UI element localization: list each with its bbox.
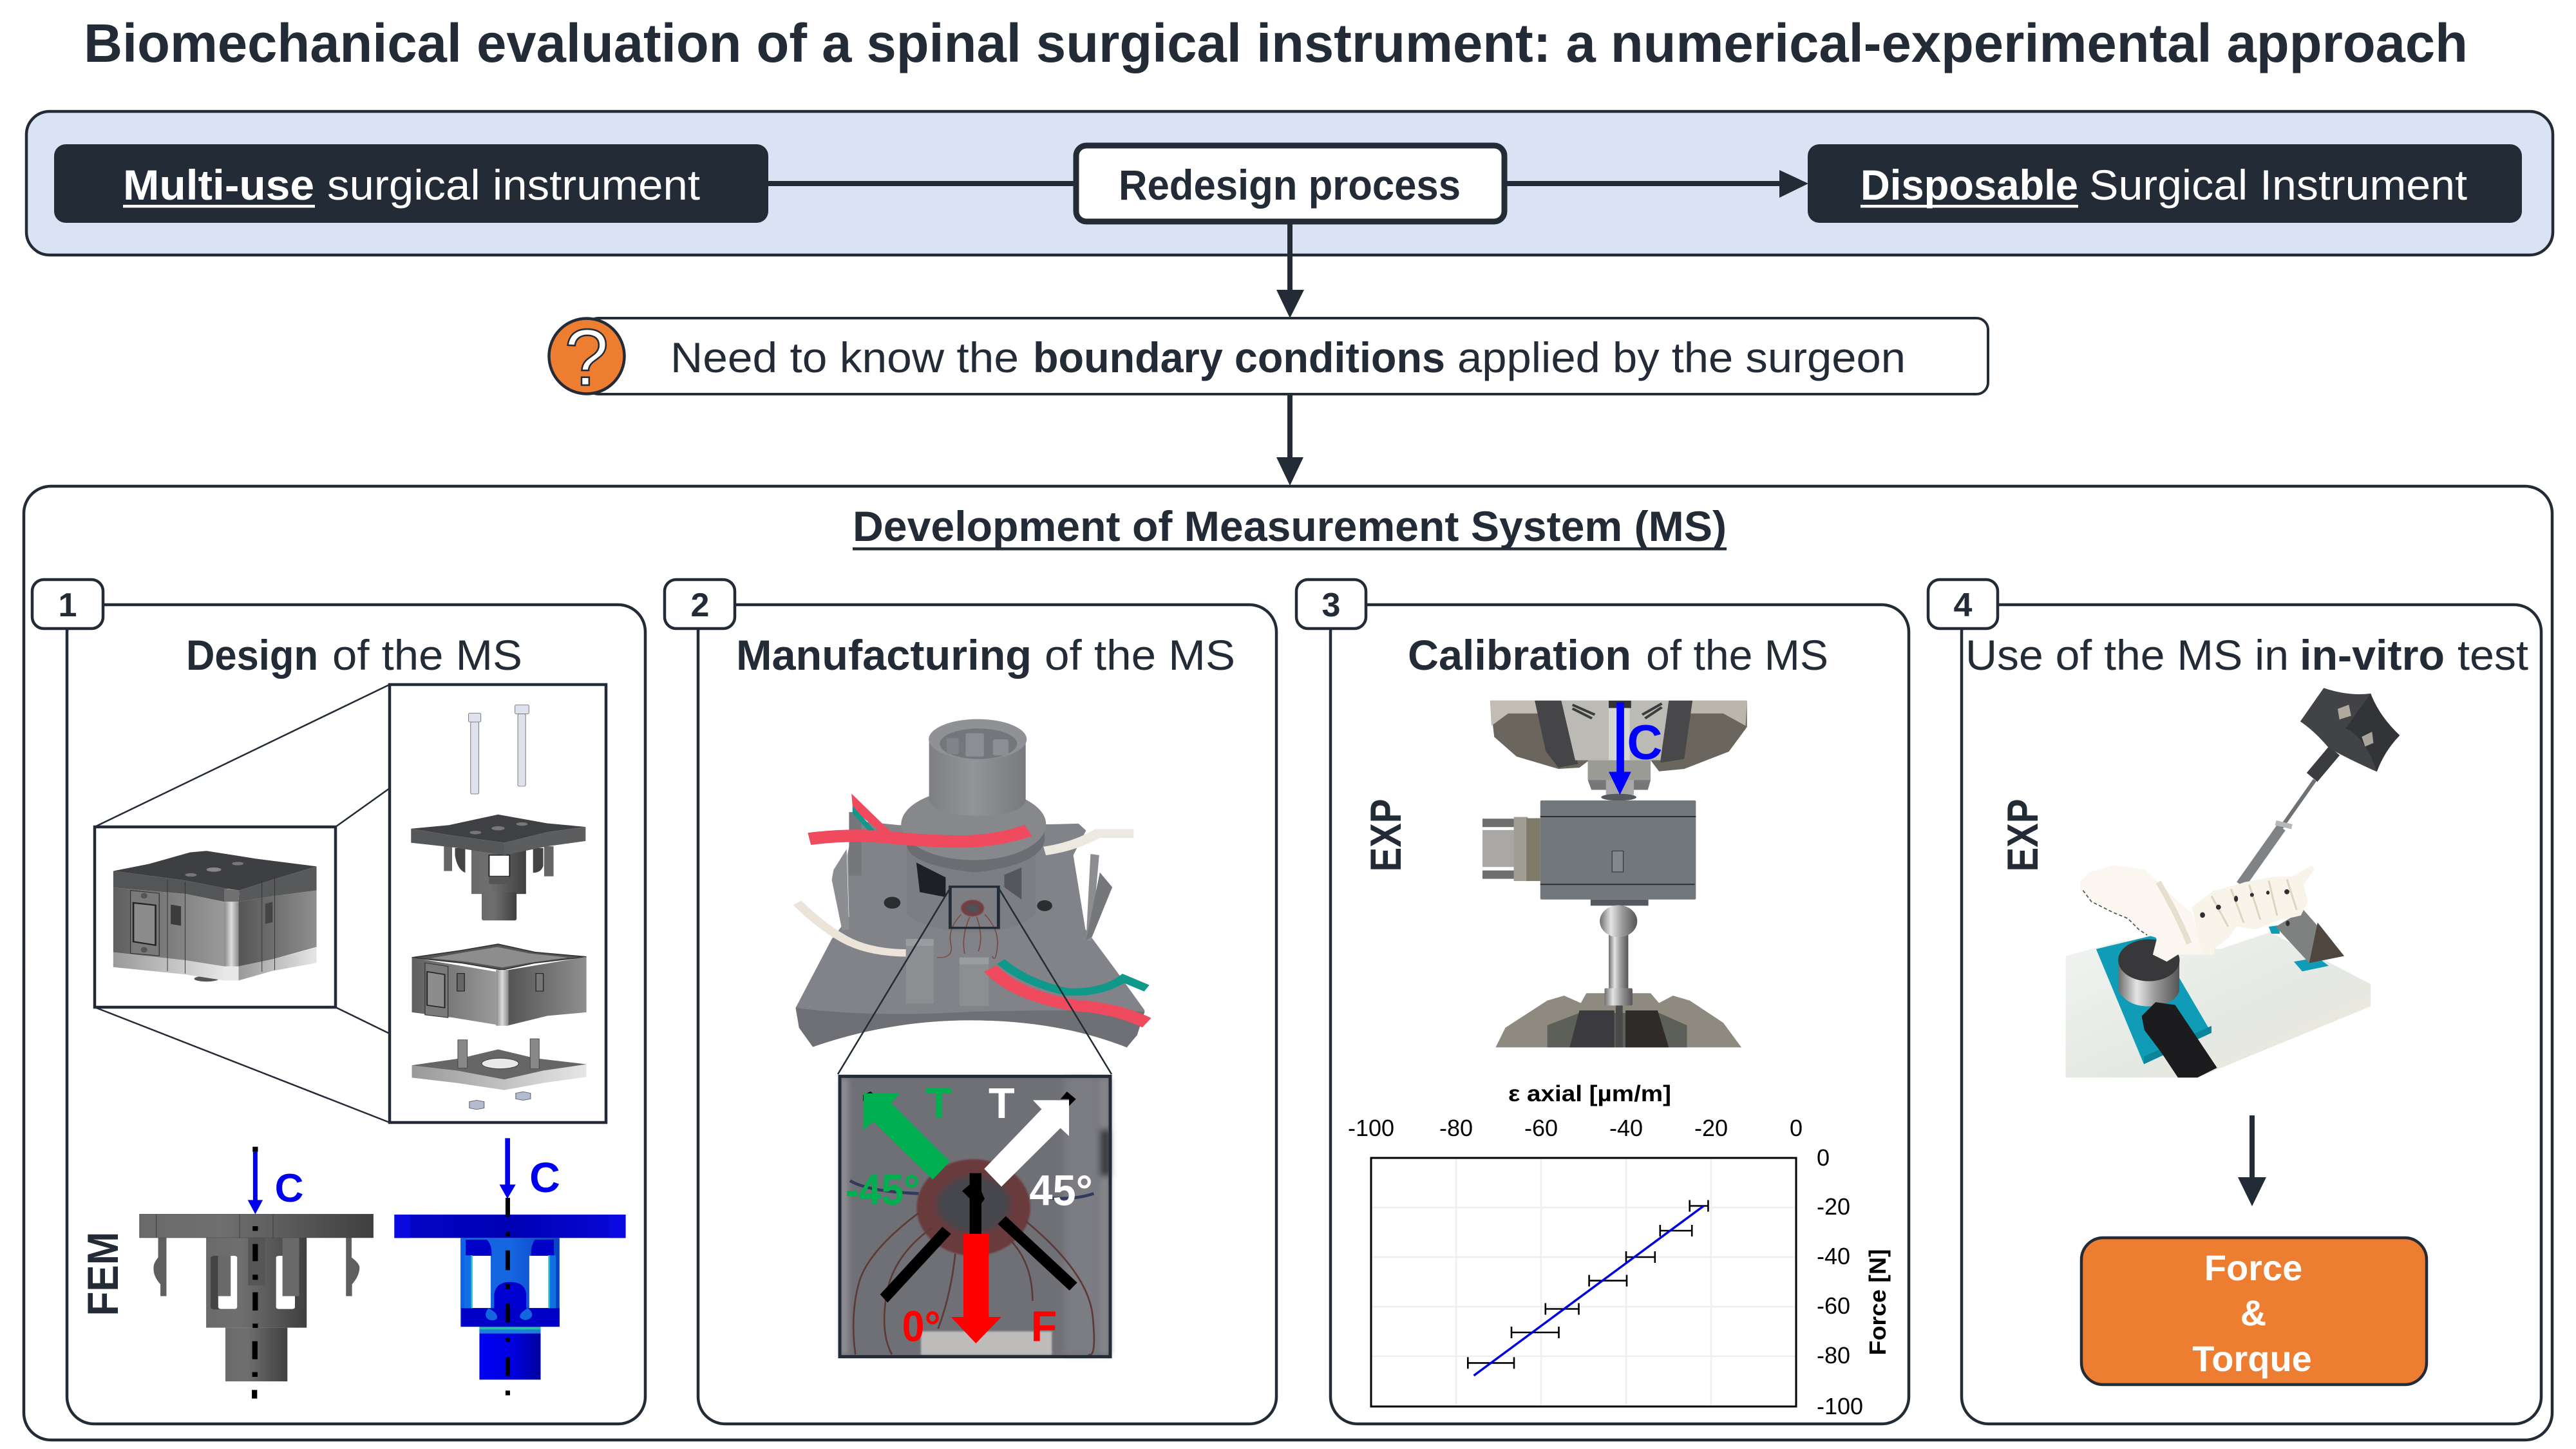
base part (412, 1039, 587, 1090)
badge 2 (665, 580, 735, 629)
badge 1: 1 (59, 587, 77, 624)
callout: boundary conditions question (549, 314, 1988, 402)
box: redesign process (1076, 146, 1504, 222)
x axis title: ε axial [µm/m] (1508, 1081, 1671, 1106)
heading: use of the MS in in-vitro test (1965, 631, 2528, 679)
photo: rosette strain gauge with orientation arrows: F (1031, 1303, 1057, 1351)
x axis labels: -20 (1694, 1115, 1728, 1141)
box: multi-use surgical instrument: surgical instrument (327, 161, 700, 209)
box: force and torque: Torque (2192, 1338, 2312, 1379)
icon: question mark (549, 314, 625, 402)
sacrum and spine (2080, 866, 2211, 961)
EXP label: EXP (1998, 799, 2047, 872)
photo: rosette strain gauge with orientation arrows (840, 1076, 1110, 1357)
panel: development of measurement system (24, 486, 2552, 1440)
box: multi-use surgical instrument (54, 144, 768, 223)
heading: use of the MS in in-vitro test: Use of the MS in (1965, 631, 2289, 679)
y axis labels: 0 (1817, 1144, 1830, 1171)
photo: in-vitro test on spine model (2066, 688, 2400, 1077)
y axis labels (1817, 1144, 1863, 1419)
panel 4: use in in-vitro test (1928, 580, 2541, 1424)
panel 2: manufacturing (665, 580, 1276, 1424)
badge 1 (32, 580, 103, 629)
housing (412, 944, 587, 1026)
panel 3: calibration (1296, 580, 1909, 1424)
box: force and torque (2081, 1238, 2427, 1385)
heading: use of the MS in in-vitro test: in-vitro (2300, 631, 2445, 679)
error bars (1468, 1200, 1708, 1368)
badge 3 (1296, 580, 1366, 629)
panel 1: design (32, 580, 645, 1424)
heading: manufacturing of the MS (736, 631, 1235, 679)
title: Biomechanical evaluation of a spinal surgical instrument: a numerical-experimental approach (84, 13, 2468, 73)
box: disposable surgical instrument (1808, 144, 2522, 223)
y axis labels: -40 (1817, 1243, 1850, 1269)
CAD: assembled measurement system (95, 827, 336, 1007)
photo: calibration test setup (1482, 701, 1747, 1047)
photo: manufactured measurement system (795, 719, 1147, 1047)
heading: design of the MS: Design (186, 631, 318, 679)
x axis labels: -100 (1348, 1115, 1394, 1141)
nuts (469, 1092, 531, 1110)
zoom connector lines (838, 887, 1112, 1074)
heading: calibration of the MS: of the MS (1646, 631, 1828, 679)
heading: manufacturing of the MS: of the MS (1045, 631, 1235, 679)
heading: development of MS: Development of Measurement System (MS) (853, 502, 1727, 550)
FEM label: FEM (79, 1231, 128, 1316)
top part (411, 815, 585, 920)
heading: use of the MS in in-vitro test: test (2458, 631, 2528, 679)
FEM model: stress contour (394, 1138, 626, 1396)
callout: boundary conditions question: Need to know the (670, 334, 1019, 381)
x axis labels: -40 (1609, 1115, 1643, 1141)
label: compression C left: C (275, 1166, 303, 1211)
badge 3: 3 (1322, 587, 1340, 624)
heading: manufacturing of the MS: Manufacturing (736, 631, 1032, 679)
box: multi-use surgical instrument: Multi-use (123, 161, 314, 209)
badge 4 (1928, 580, 1998, 629)
CAD: exploded view (390, 685, 606, 1122)
y axis labels: -60 (1817, 1293, 1850, 1319)
calibration line (1473, 1206, 1704, 1376)
icon: question mark: ? (565, 314, 609, 402)
x axis labels (1348, 1115, 1803, 1141)
photo: rosette strain gauge with orientation arrows: -45° (846, 1167, 920, 1215)
chart: force vs axial strain (1348, 1081, 1891, 1419)
EXP label: EXP (1361, 799, 1410, 872)
y axis title: Force [N] (1864, 1249, 1891, 1355)
box: disposable surgical instrument: Disposable (1861, 161, 2078, 209)
x axis labels: -80 (1439, 1115, 1473, 1141)
instrument shaft (2240, 751, 2334, 885)
FEM model: geometry (140, 1147, 373, 1399)
heading: design of the MS: of the MS (332, 631, 522, 679)
screws (469, 705, 529, 794)
photo: rosette strain gauge with orientation arrows: T (925, 1080, 952, 1128)
x axis labels: -60 (1524, 1115, 1558, 1141)
x axis labels: 0 (1790, 1115, 1803, 1141)
heading: calibration of the MS: Calibration (1408, 631, 1631, 679)
panel: redesign process banner (26, 111, 2553, 255)
arrow: redesign to disposable (1504, 170, 1808, 198)
box: disposable surgical instrument: Surgical Instrument (2089, 161, 2467, 209)
label: compression C: C (1627, 715, 1662, 770)
y axis labels: -20 (1817, 1193, 1850, 1220)
photo: rosette strain gauge with orientation arrows: 45° (1029, 1168, 1093, 1215)
callout: boundary conditions question: boundary conditions (1033, 334, 1445, 381)
heading: design of the MS (186, 631, 522, 679)
y axis labels: -100 (1817, 1393, 1863, 1419)
heading: calibration of the MS (1408, 631, 1828, 679)
badge 4: 4 (1954, 587, 1973, 624)
arrow: test to output (2238, 1115, 2266, 1206)
badge 2: 2 (691, 587, 709, 624)
callout: boundary conditions question: applied by the surgeon (1457, 334, 1906, 381)
label: compression C right: C (529, 1153, 560, 1201)
arrow: question to measurement system (1276, 394, 1303, 486)
zoom connector lines (95, 685, 390, 1122)
box: force and torque: & (2240, 1293, 2266, 1333)
photo: rosette strain gauge with orientation arrows: 0° (902, 1303, 941, 1351)
box: redesign process: Redesign process (1119, 161, 1461, 209)
y axis labels: -80 (1817, 1342, 1850, 1368)
arrow: redesign to question (1276, 222, 1304, 318)
photo: rosette strain gauge with orientation arrows: T (989, 1080, 1015, 1128)
box: force and torque: Force (2204, 1247, 2302, 1288)
connector: multi-use to redesign (766, 181, 1075, 186)
